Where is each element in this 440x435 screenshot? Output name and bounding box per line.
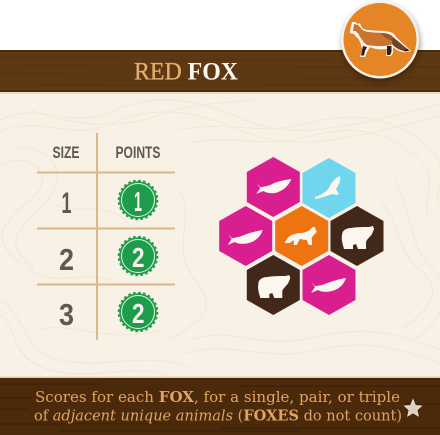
hex: bear right (330, 206, 384, 266)
points badge 3: 2 (132, 298, 144, 329)
column heading: points: POINTS (116, 144, 160, 162)
points badge 1 (119, 181, 157, 219)
points badge 1: 1 (134, 186, 142, 217)
footer text: of adjacent unique animals (FOXES do not count) (34, 406, 402, 424)
hex: fox centre (275, 206, 328, 266)
size value 1: 1 (62, 187, 72, 220)
footer text (34, 388, 402, 424)
icon: star (404, 400, 422, 416)
icon: fox badge (341, 0, 420, 82)
header wood band (0, 50, 440, 94)
points badge 2 (119, 237, 157, 275)
size value 3: 3 (59, 297, 74, 332)
hex: salmon left (219, 206, 272, 266)
icon: fox illustration (350, 22, 411, 57)
column heading: size: SIZE (52, 144, 80, 162)
hex: salmon top (247, 157, 300, 217)
table: size and points (37, 133, 175, 340)
points badge 3 (119, 293, 157, 331)
hexagon cluster (219, 157, 384, 315)
title: RED FOX (134, 58, 238, 86)
size value 2: 2 (59, 242, 74, 277)
table lines (37, 133, 175, 340)
footer text: Scores for each FOX, for a single, pair, or triple (35, 388, 400, 406)
panel: parchment contour background (0, 94, 440, 378)
hex: salmon bottom (302, 255, 356, 315)
hex: bear bottom (247, 255, 300, 315)
footer wood band (0, 376, 440, 435)
points badge 2: 2 (132, 242, 144, 273)
hex: eagle (302, 158, 356, 218)
